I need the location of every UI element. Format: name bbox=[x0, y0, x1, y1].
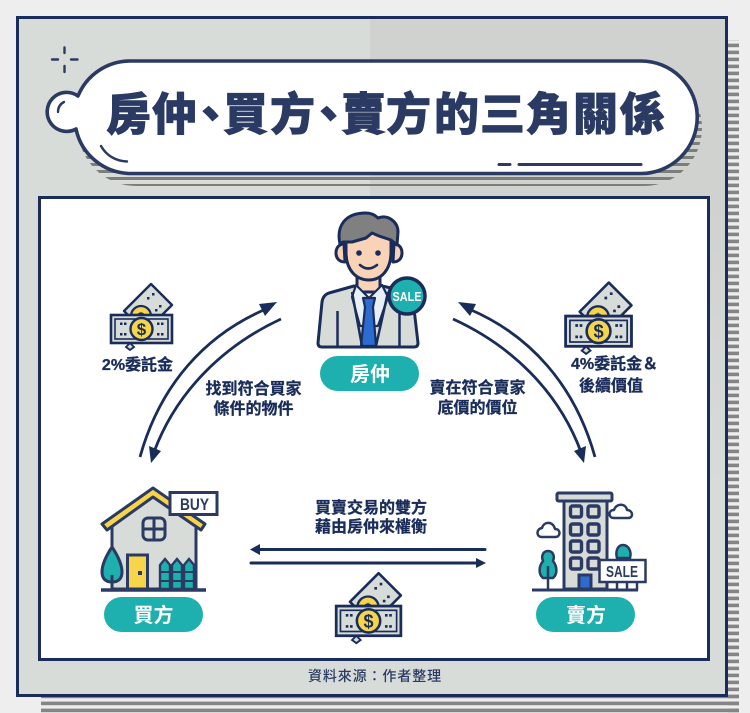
text: find property: 找到符合買家 bbox=[205, 379, 302, 398]
icon: money, right bbox=[566, 283, 631, 354]
text: 4% commission bbox=[571, 354, 658, 395]
BUY sign: BUY bbox=[180, 495, 210, 514]
title banner bbox=[47, 61, 702, 186]
source note: 資料來源：作者整理 bbox=[308, 668, 442, 684]
SALE badge: SALE bbox=[392, 289, 422, 304]
arrows: agent and buyer bbox=[140, 302, 281, 463]
label: buyer: 買方 bbox=[134, 603, 174, 627]
text: sell at price: 賣在符合賣家 bbox=[429, 378, 526, 397]
label: agent bbox=[320, 356, 419, 391]
label: seller bbox=[536, 597, 635, 632]
text: both sides of the deal: 買賣交易的雙方 bbox=[315, 498, 427, 517]
label: agent: 房仲 bbox=[350, 363, 390, 386]
text: 4% commission: 4%委託金＆ bbox=[571, 354, 658, 373]
icon: money, bottom bbox=[336, 573, 401, 643]
label: buyer bbox=[104, 597, 203, 632]
text: find property: 條件的物件 bbox=[213, 400, 294, 418]
text: sell at price bbox=[429, 378, 526, 417]
icon: house bbox=[101, 488, 217, 590]
text: both sides of the deal: 藉由房仲來權衡 bbox=[315, 517, 427, 536]
icon: office building bbox=[532, 493, 646, 590]
title text: 房仲、買方、賣方的三角關係 bbox=[106, 89, 665, 140]
icon: agent bbox=[318, 213, 425, 347]
sparkle decoration bbox=[52, 48, 78, 72]
text: both sides of the deal bbox=[315, 498, 427, 536]
label: seller: 賣方 bbox=[566, 603, 606, 627]
text: 4% commission: 後續價值 bbox=[579, 376, 643, 395]
white content panel bbox=[40, 198, 708, 660]
text: find property bbox=[205, 379, 302, 418]
SALE sign: SALE bbox=[606, 564, 638, 581]
text: sell at price: 底價的價位 bbox=[437, 398, 518, 417]
arrow: seller to buyer bbox=[250, 544, 485, 555]
icon: money, left bbox=[111, 284, 172, 350]
arrow: buyer to seller bbox=[251, 558, 486, 568]
arrows: agent and seller bbox=[453, 302, 595, 463]
text: 2% commission: 2%委託金 bbox=[102, 355, 173, 374]
